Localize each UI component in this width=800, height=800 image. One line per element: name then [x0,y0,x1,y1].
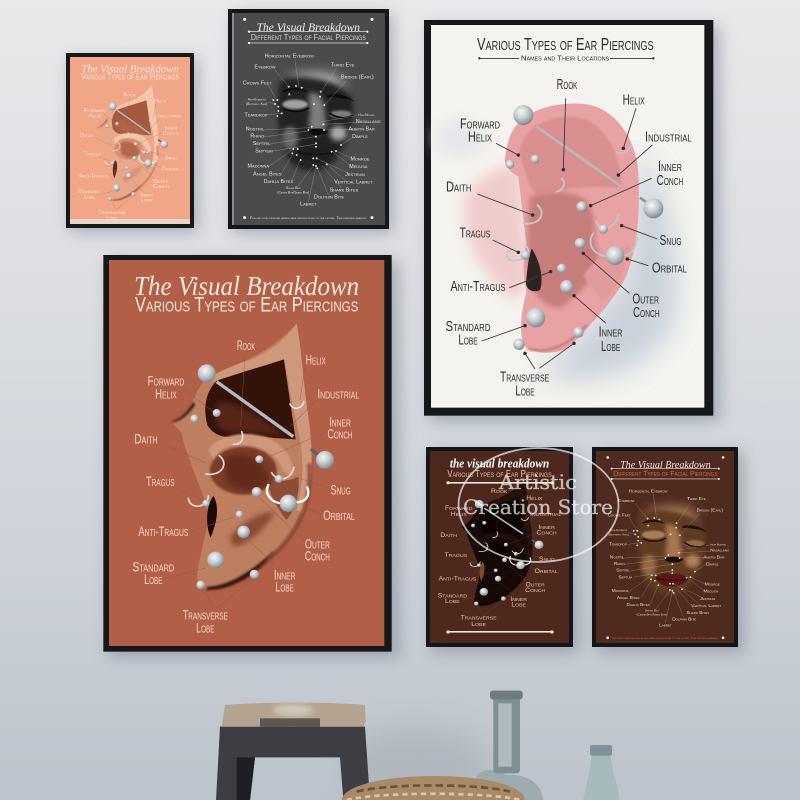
ear illustration [168,323,334,608]
shadow on wall [343,727,490,800]
brown poster text: Conch [537,530,557,537]
grey poster labels: Nostril [246,126,265,132]
brown poster text: Inner [538,524,555,531]
brown poster text [438,456,562,628]
brown poster text: Tragus [445,552,468,559]
salmon poster text [78,62,183,221]
grey poster labels: Angel Bites [253,171,282,177]
grey poster labels: (Butterfly Kiss) [246,102,267,106]
grey poster labels: Medusa [349,164,368,170]
brown poster decorative bars [446,481,554,634]
brown poster text: Inner [510,596,527,603]
brown face poster labels: Follow your piercing after-care instructions to the letter. This ensures healing. [613,636,718,640]
brown face poster labels: Septum [618,574,633,580]
grey poster labels [243,54,381,220]
white poster labels: Rook [557,77,578,93]
brown poster text: Orbital [535,568,558,575]
grey poster heading: The Visual Breakdown [257,20,360,34]
terracotta poster labels: Tragus [146,473,175,489]
poster: terracotta ear chart [103,255,392,652]
brown face poster labels: Vertical Labret [691,603,721,609]
terracotta poster labels: Inner [329,414,351,430]
brown face poster labels: Crows Feet [608,513,631,519]
brown face poster heading [606,456,724,639]
brown face poster labels: Bridge (Earl) [697,507,723,513]
brown face poster labels: Dolphin Bite [672,616,696,622]
brown face poster labels: Shark Bites [686,610,709,616]
brown face poster labels: (Canine Bite/Snake Bite) [637,613,667,617]
face illustration [263,60,358,202]
brown poster text: Outer [526,582,545,588]
grey poster heading: Different Types of Facial Piercings [251,33,366,42]
white poster labels: Inner [658,159,682,175]
white poster labels: Lobe [458,332,478,348]
terracotta poster labels [132,337,359,635]
white poster labels: Outer [632,292,659,308]
white poster labels: Transverse [500,370,550,386]
brown poster text: Forward [445,505,473,512]
brown poster text: Conch [525,587,546,594]
poster: brown facial piercings [592,447,738,647]
white poster labels: Helix [468,130,492,146]
face illustration [625,494,711,623]
grey poster labels: Rhino [250,134,264,140]
terracotta poster labels: Transverse [183,606,228,622]
brown face poster labels: Jestrum [700,596,716,602]
terracotta poster title [134,271,359,317]
brown face poster labels: Austin Bar [703,555,725,561]
watermark: Artistic Creation Store: Artistic [498,470,577,494]
grey poster labels: Follow your piercing after-care instructions to the letter. This ensures healing. [250,216,367,220]
brown face poster labels: Rhino [614,561,625,567]
brown poster text: the visual breakdown [450,456,549,470]
brown face poster labels: Dimple [706,561,718,567]
leader lines [477,98,657,369]
terracotta poster labels: Forward [148,373,184,389]
grey poster labels: Septril [253,141,271,147]
furniture group [216,691,619,800]
grey poster labels: Nasallang [356,119,381,125]
watermark: Artistic Creation Store [458,448,618,562]
salmon poster text: Rook [123,92,137,98]
grey poster labels: Bridge (Earl) [341,75,374,81]
salmon poster text: Lobe [84,194,95,200]
grey poster labels: (Canine Bite/Snake Bite) [277,190,309,194]
brown poster text: Helix [451,511,467,518]
brown face poster labels: Nostril [610,554,625,560]
stool [216,702,370,800]
white poster labels: Lobe [515,384,535,400]
grey poster labels: High Nostril [358,113,376,117]
brown face poster labels: Teardrop [609,542,627,548]
terracotta poster labels: Anti-Tragus [138,523,189,539]
poster: white watercolour ear chart [424,20,713,416]
terracotta poster labels: Lobe [196,619,215,635]
ear illustration [505,104,663,353]
white poster title [477,34,654,63]
watercolour washes [433,118,677,380]
grey poster labels: Anti-Eyebrow [248,97,266,101]
ear illustration [96,85,168,209]
brown poster text: Snug [539,556,555,563]
brown face poster labels: Anti-Eyebrow [610,528,627,532]
brown face poster labels: Medusa [704,589,718,595]
brown face poster labels: Septril [616,568,630,574]
terracotta poster labels: Conch [305,548,330,564]
white poster labels: Conch [657,173,683,189]
brown face poster labels: Monroe [705,582,720,588]
salmon poster text: Lobe [141,198,153,204]
brown face poster labels: Third Eye [687,496,706,502]
salmon poster text: Tragus [84,152,102,158]
poster: salmon ear chart [66,53,194,228]
brown poster text: Helix [526,495,543,502]
salmon poster text: The Visual Breakdown [81,62,179,75]
white poster labels: Orbital [652,261,687,277]
terracotta poster labels: Rook [237,337,255,353]
grey poster labels: Shark Bites [330,187,359,193]
salmon poster text: Orbital [161,166,180,172]
brown poster text: Industrial [530,511,562,518]
watermark: Artistic Creation Store: Creation Store [463,495,613,519]
white poster labels: Standard [445,319,490,335]
white poster title: Names and Their Locations [521,54,610,63]
terracotta poster labels: Industrial [317,385,359,401]
brown face poster labels: High Nostril [710,542,727,546]
brown face poster heading: Different Types of Facial Piercings [613,469,718,478]
brown face poster heading: The Visual Breakdown [620,459,711,471]
salmon poster text: Daith [80,133,93,139]
white poster labels: Conch [633,305,660,321]
salmon poster text: Forward [84,108,106,114]
wicker basket [342,776,525,800]
salmon poster text: Snug [165,155,177,161]
grey poster labels: Austin Bar [349,127,375,133]
grey poster labels: Dahlia Bites [264,179,293,185]
brown face poster labels: Madonna [612,588,629,594]
terracotta poster labels: Snug [331,481,351,497]
brown face poster labels: Eyebrow [618,498,635,504]
terracotta poster labels: Daith [134,430,158,446]
terracotta poster labels: Standard [132,559,174,575]
salmon poster text: Conch [153,184,169,190]
brown poster text: Rook [491,488,508,495]
terracotta poster labels: Lobe [144,571,163,587]
white poster labels: Tragus [460,226,491,242]
salmon poster text: Standard [78,189,101,195]
brown poster text: Daith [440,532,457,539]
white poster labels: Anti-Tragus [450,279,506,295]
salmon poster text: Outer [153,179,169,185]
white poster labels: Inner [599,325,623,341]
grey poster labels: Eyebrow [254,64,276,70]
grey poster labels: Crows Feet [243,80,272,86]
salmon poster text: Inner [164,126,177,132]
terracotta poster title: The Visual Breakdown [134,271,359,301]
terracotta poster labels: Lobe [275,579,294,595]
terracotta poster labels: Helix [306,351,326,367]
grey poster labels: Jestrum [345,172,365,178]
brown poster text: Transverse [461,615,497,622]
salmon poster text: Inner [140,192,153,198]
brown poster text: Lobe [471,621,487,628]
brown face poster labels: Dahlia Bites [627,602,650,608]
grey poster labels: Spider Bite [286,186,301,190]
grey poster labels: Third Eye [331,62,355,68]
large glass bottle [477,691,543,800]
grey poster labels: Dolphin Bite [314,195,344,201]
frame shadows [70,14,744,657]
brown poster text: Anti-Tragus [439,576,477,583]
brown poster text: Various Types of Ear Piercings [447,469,552,480]
brown poster text: Lobe [511,602,527,609]
terracotta poster title: Various Types of Ear Piercings [135,293,358,317]
grey poster labels: Dimple [352,134,368,140]
brown face poster labels: (Butterfly Kiss) [608,532,629,536]
grey poster labels: Monroe [350,156,370,162]
brown face poster labels [608,488,730,640]
brown face poster labels: Horizontal Eyebrow [629,488,667,494]
brown poster text: Standard [438,593,467,599]
terracotta poster labels: Inner [274,566,295,582]
salmon poster text: Lobe [106,215,118,221]
white poster title: Various Types of Ear Piercings [477,34,654,54]
white poster labels: Forward [460,116,500,132]
white poster labels: Daith [446,180,471,196]
terracotta poster labels: Conch [327,425,352,441]
salmon poster text: Conch [163,131,179,137]
brown face poster labels: Angel Bites [617,595,640,601]
poster: grey facial piercings [228,9,389,229]
white poster labels: Snug [660,233,682,249]
salmon poster text: Helix [89,113,102,119]
brown poster text: Lobe [445,598,460,605]
grey poster labels: Septum [255,148,273,154]
grey poster heading [243,18,373,219]
terracotta poster labels: Outer [305,535,330,551]
salmon poster text: Helix [154,99,167,105]
white poster labels: Lobe [601,339,621,355]
small glass bottle [583,745,619,800]
white poster labels: Helix [623,92,645,108]
brown face poster labels: Spider Bite [645,609,659,613]
white poster labels: Industrial [645,130,692,146]
grey poster labels: Teardrop [244,112,268,118]
salmon poster text: Transverse [98,210,126,216]
salmon poster text: Industrial [158,113,183,119]
terracotta poster labels: Orbital [323,507,355,523]
poster: dark brown ear chart [426,447,573,647]
white poster labels [445,77,692,400]
brown face poster labels: Labret [659,622,672,629]
salmon poster text: Anti-Tragus [79,173,109,179]
terracotta poster labels: Helix [155,385,177,401]
grey poster labels: Madonna [248,163,269,169]
brown face poster labels: Nasallang [710,548,730,554]
salmon poster text: Various Types of Ear Piercings [81,72,179,82]
ear illustration [460,481,544,615]
grey poster labels: Labret [300,201,317,207]
grey poster labels: Vertical Labret [334,180,373,186]
grey poster labels: Horizontal Eyebrow [265,54,314,60]
